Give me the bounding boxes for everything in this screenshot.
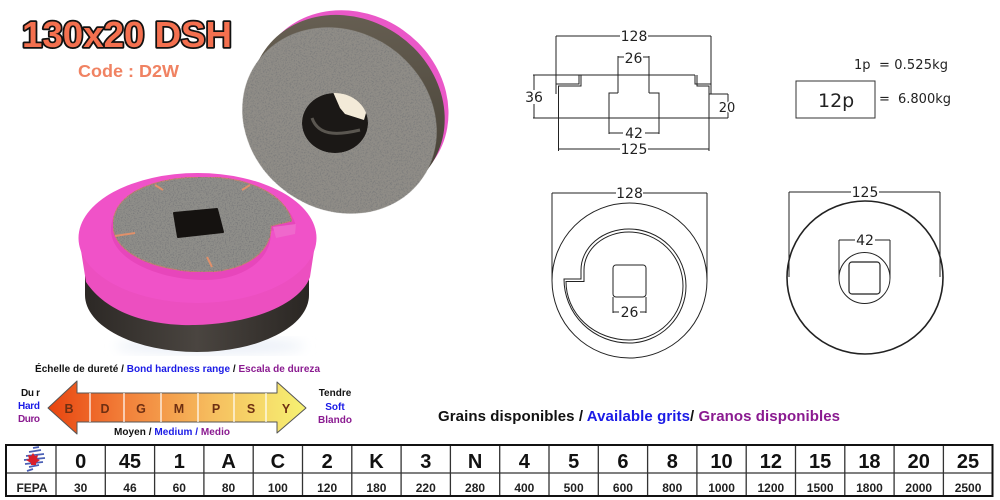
dimension 20 [727,94,729,118]
drawing: bottom view [787,185,943,354]
orange keys [115,185,250,267]
soft label: Soft [325,402,345,413]
grit codes row: 12 [760,451,782,473]
weight info [796,58,951,118]
total equals: = [879,92,890,107]
white separators [90,393,266,422]
total weight: 6.800kg [898,92,951,107]
table border [6,445,992,496]
dimension 125 [558,148,709,150]
drawing: cross-section: 128 [621,29,647,45]
centre hole [302,92,372,153]
grit codes row: 1 [174,451,185,473]
FEPA row: 100 [268,481,288,495]
square hole [849,262,880,294]
floor shadow [115,338,305,354]
grit codes row: 15 [809,451,831,473]
drawing: cross-section: 36 [525,90,543,106]
notched spiral outer line [564,229,686,343]
grade letters: M [174,402,184,416]
weight per piece: 1p [854,58,871,73]
notched spiral inner line [566,232,683,340]
hard label: Du r [21,388,40,399]
dark body [85,270,309,352]
dimension 36 [533,75,535,118]
square hole [174,209,223,237]
raised flange [111,178,296,280]
grit codes row: 10 [710,451,733,473]
FEPA row: 80 [222,481,236,495]
FEPA row: 2000 [905,481,932,495]
dimension 26 [618,56,649,93]
grit codes row: 8 [667,451,678,473]
drawing: top view with notch: 26 [621,305,638,321]
drawing: cross-section: 20 [719,101,735,116]
locating notch [273,224,296,238]
square hole [613,265,646,297]
icon: maple leaf logo [24,447,45,471]
FEPA row: 46 [123,481,137,495]
quantity: 12p [818,90,854,112]
weight per piece value: = 0.525kg [879,58,948,73]
grit codes row: C [271,451,285,473]
drawing: cross-section: 125 [621,142,647,158]
hardness scale arrow [48,381,306,434]
drawing: cross-section: 42 [625,126,643,142]
abrasive top [113,177,292,272]
FEPA row: FEPA [16,481,48,495]
hard label: Hard [18,401,40,412]
drawing: cross-section [525,29,735,158]
hard label [18,388,40,425]
soft label: Tendre [319,388,352,399]
dimension 42 [839,240,890,278]
grit codes row: 2 [322,451,333,473]
grit codes row: 18 [858,451,881,473]
grits heading: Grains disponibles / Available grits/ Granos disponibles [438,408,840,425]
grit codes row: K [369,451,384,473]
FEPA row: 220 [416,481,436,495]
grit codes row: 45 [119,451,141,473]
photo: upright grinding wheel [242,10,448,214]
FEPA row [16,481,982,495]
grade letters: S [247,402,255,416]
soft label [318,388,352,426]
arrow shape [48,381,306,434]
product code: Code : D2W [78,61,179,81]
quantity box [796,81,875,118]
FEPA row: 500 [564,481,584,495]
drawing: cross-section: 26 [625,51,642,67]
grade letters: D [100,402,110,416]
grit codes row [75,451,979,473]
profile [533,75,728,151]
grit codes row: 0 [75,451,86,473]
grade letters: Y [282,402,291,416]
drawing: bottom view: 42 [856,233,874,249]
pink top surface [78,173,316,303]
grit codes row: 25 [957,451,979,473]
grade letters: G [136,402,146,416]
grit codes row: A [221,451,236,473]
FEPA row: 30 [74,481,88,495]
hardness scale heading: Échelle de dureté / Bond hardness range / Escala de dureza [35,362,320,375]
FEPA row: 180 [366,481,387,495]
FEPA row: 1200 [757,481,785,495]
grade letters: P [212,402,220,416]
inner circle [839,252,890,304]
grade letters: B [64,402,74,416]
pink back rim [219,0,485,233]
dimension 128 [552,193,707,280]
medium label: Moyen / Medium / Medio [114,427,230,438]
dimension 42 [609,132,659,134]
dimension 125 [789,192,940,277]
dimension 26 [613,297,646,313]
FEPA row: 600 [613,481,633,495]
grit codes row: 6 [617,451,629,473]
outer double circle [787,201,943,354]
abrasive face [206,0,473,251]
grit table [6,445,992,496]
FEPA row: 400 [514,481,535,495]
FEPA row: 120 [317,481,337,495]
FEPA row: 800 [662,481,683,495]
drawing: top view with notch: 128 [616,186,643,202]
FEPA row: 1000 [708,481,735,495]
outer circle [552,203,707,358]
FEPA row: 1800 [856,481,883,495]
FEPA row: 2500 [955,481,982,495]
pink side [79,238,316,325]
overall dimension 128 [556,36,711,94]
grade letters [64,402,291,416]
grit codes row: 5 [568,451,579,473]
grit codes row: 3 [420,451,431,473]
drawing: top view with notch [552,186,707,358]
grit codes row: 20 [908,451,930,473]
grit codes row: 4 [519,451,531,473]
dark wheel band [214,0,481,239]
soft label: Blando [318,415,352,426]
photo: flat grinding wheel with pink layer [78,173,316,354]
table grid [6,445,992,496]
title: 130x20 DSH [22,14,232,55]
hard label: Duro [18,414,40,425]
grit codes row: N [468,451,482,473]
drawing: bottom view: 125 [852,185,878,201]
FEPA row: 60 [173,481,186,495]
FEPA row: 280 [465,481,485,495]
FEPA row: 1500 [807,481,834,495]
